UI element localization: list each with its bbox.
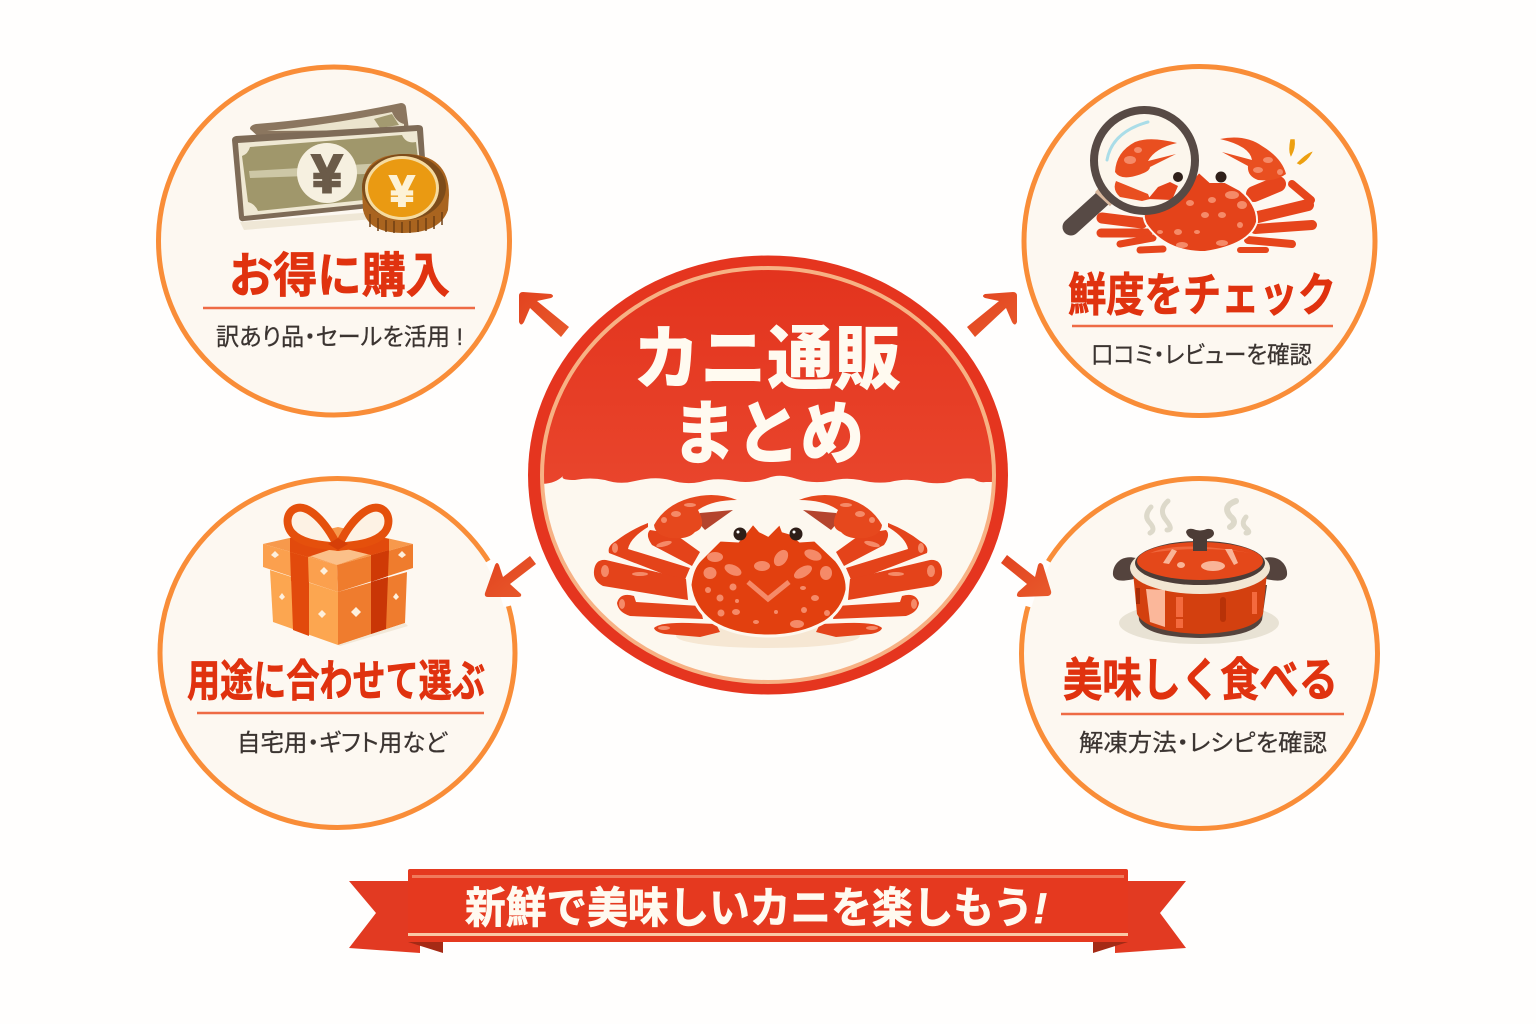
crab legs and claw, left [594, 495, 737, 637]
arrow: to お得に購入 [519, 292, 569, 337]
text: 口コミ・レビューを確認: 口コミ・レビューを確認 [1091, 342, 1312, 369]
crab body [690, 523, 847, 636]
heading: 用途に合わせて選ぶ: 用途に合わせて選ぶ [187, 657, 485, 706]
arrow: to 用途に合わせて選ぶ [485, 556, 536, 597]
arrow: to 鮮度をチェック [967, 292, 1017, 337]
heading: まとめ: まとめ [672, 395, 864, 473]
icon: steaming pot [1113, 501, 1287, 644]
banner: 新鮮で美味しいカニを楽しもう! [349, 869, 1186, 953]
crab legs and claw, right [799, 495, 942, 637]
panel: centre badge カニ通販まとめ [528, 250, 1010, 694]
panel: 用途に合わせて選ぶ [160, 478, 515, 828]
panel: 鮮度をチェック [1024, 66, 1375, 416]
heading: お得に購入: お得に購入 [229, 250, 450, 303]
panel: お得に購入 [158, 67, 510, 415]
panel: 美味しく食べる [1022, 478, 1378, 828]
text: 訳あり品・セールを活用!: 訳あり品・セールを活用 ! [216, 324, 463, 351]
icon: magnifier over crab [1071, 110, 1312, 252]
icon: yen bills and coin [232, 103, 449, 233]
icon: crab [594, 495, 942, 648]
icon: gift box [263, 508, 413, 646]
arrow: to 美味しく食べる [1001, 555, 1051, 597]
icon: yen bills and coin: ¥ [312, 144, 342, 204]
icon: yen bills and coin: ¥ [390, 167, 415, 216]
text: banner message: 新鮮で美味しいカニを楽しもう! [465, 885, 1047, 933]
text: 自宅用・ギフト用など: 自宅用・ギフト用など [237, 730, 448, 757]
heading: カニ通販: カニ通販 [633, 320, 901, 398]
heading: 美味しく食べる: 美味しく食べる [1063, 654, 1338, 706]
text: 解凍方法・レシピを確認: 解凍方法・レシピを確認 [1079, 730, 1327, 757]
heading: 鮮度をチェック: 鮮度をチェック [1068, 269, 1336, 321]
